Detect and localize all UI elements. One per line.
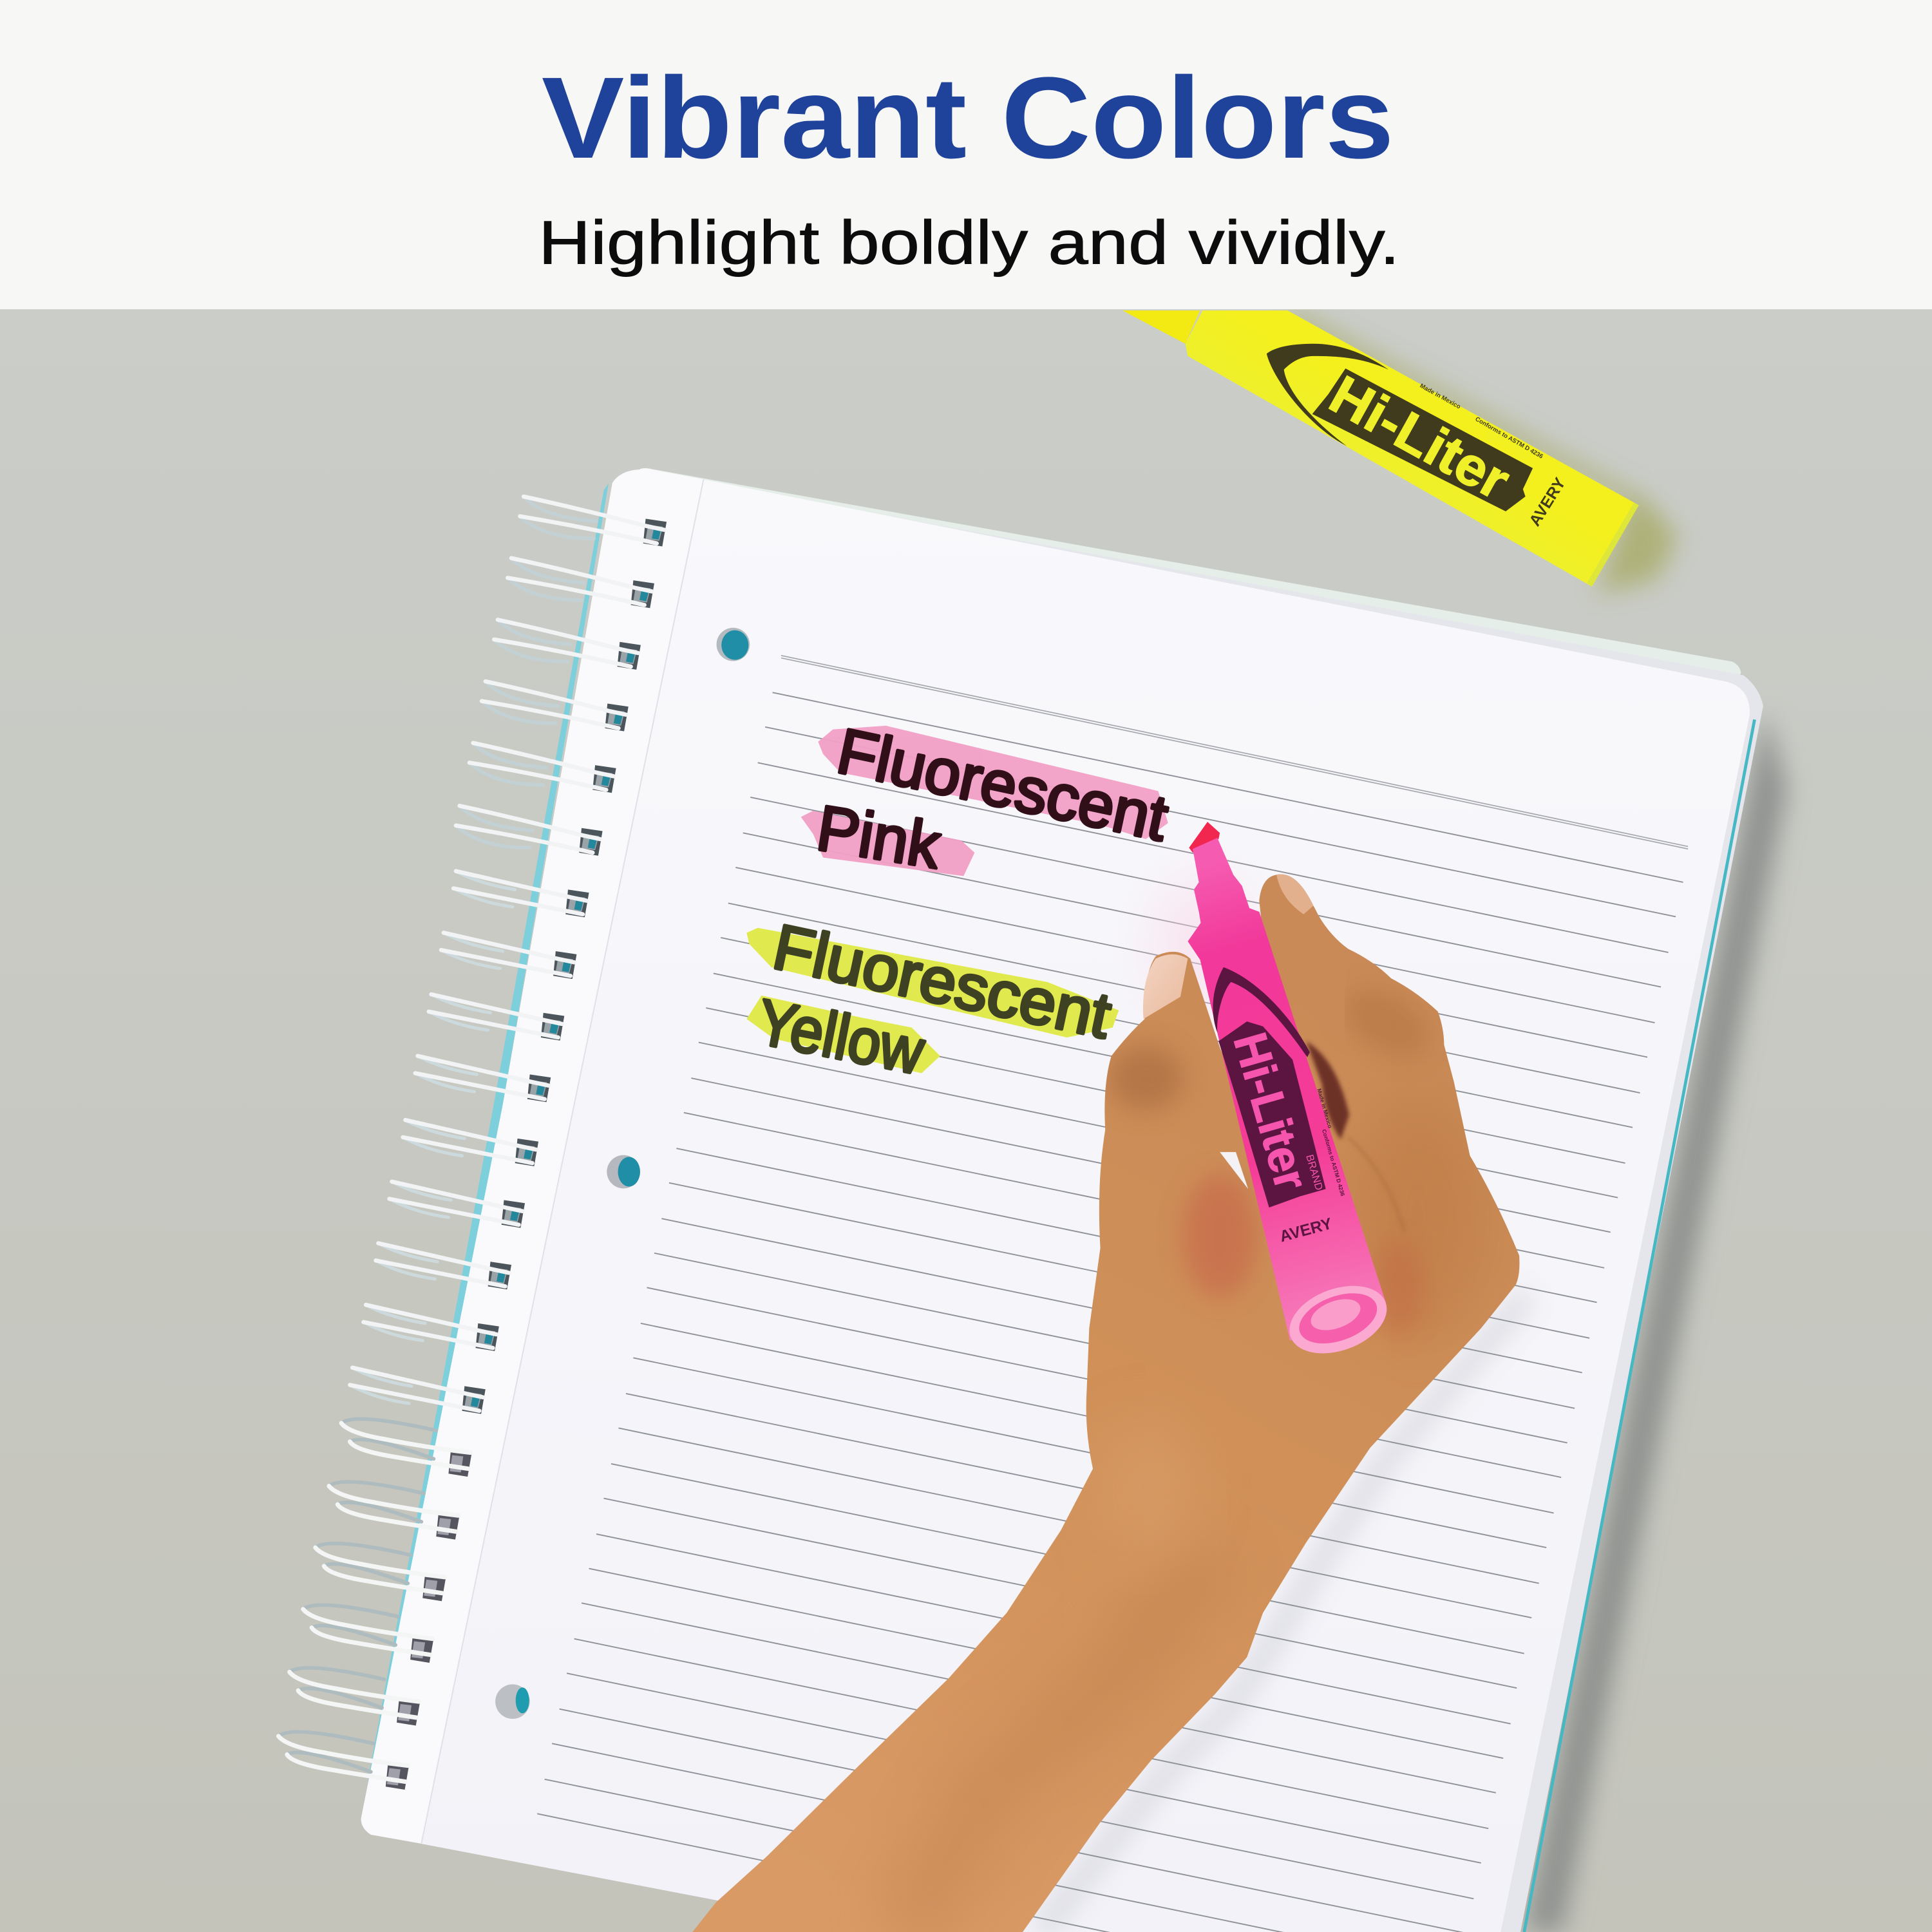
ruled lines xyxy=(537,692,1683,1932)
title: Vibrant Colors xyxy=(542,53,1394,183)
logo swoosh xyxy=(1267,344,1388,446)
dark gap behind marker xyxy=(1306,1041,1349,1140)
wrist highlight xyxy=(1135,1458,1168,1525)
index finger over marker xyxy=(1259,874,1348,1045)
thumb nail xyxy=(1143,954,1188,1019)
barrel end cap centre xyxy=(1307,1293,1365,1336)
skin silhouette xyxy=(692,875,1519,1932)
barrel end cap inner xyxy=(1293,1283,1384,1353)
perforation line xyxy=(421,479,703,1843)
pink glow on paper xyxy=(1152,875,1251,1023)
handwritten: Fluorescent Yellow: Yellow xyxy=(752,986,930,1088)
arm shadow on paper xyxy=(1041,1294,1528,1932)
notebook shadow xyxy=(1526,715,1786,1932)
hand gap showing paper xyxy=(1220,1152,1248,1189)
brand small word: BRAND xyxy=(1303,1153,1325,1191)
handwritten: Fluorescent Pink: Pink xyxy=(812,792,945,882)
page stack xyxy=(639,469,1763,1932)
avery logo: AVERY xyxy=(1526,475,1569,529)
brand name: Hi-Liter xyxy=(1320,364,1520,511)
barrel small print xyxy=(1316,1088,1346,1197)
avery logo: AVERY xyxy=(1278,1215,1334,1245)
notebook xyxy=(278,468,1786,1932)
knuckle shading xyxy=(1109,1046,1183,1110)
teal cover right edge xyxy=(1524,719,1754,1932)
barrel xyxy=(1188,838,1386,1341)
knuckle ridge xyxy=(1350,994,1425,1052)
pink highlighter xyxy=(1188,822,1396,1366)
punch hole top xyxy=(717,628,750,661)
back cover top band xyxy=(647,468,1741,692)
binding strip xyxy=(361,469,703,1843)
page sheet xyxy=(361,468,1750,1932)
barrel small print xyxy=(1419,383,1544,460)
red glow by marker base xyxy=(1374,1238,1423,1337)
forearm dark band xyxy=(914,1718,1079,1908)
palm shadow xyxy=(1367,1122,1490,1318)
punch hole middle xyxy=(607,1155,640,1188)
chisel tip xyxy=(1189,822,1220,853)
yellow marker shadow xyxy=(1282,310,1678,594)
hand and forearm xyxy=(692,875,1519,1932)
double header rule xyxy=(781,656,1688,849)
header band xyxy=(0,0,1932,309)
finger nail xyxy=(1276,874,1314,914)
subtitle: Highlight boldly and vividly. xyxy=(538,208,1399,277)
red glow beside marker xyxy=(1183,1174,1257,1298)
teal cover left edge xyxy=(366,483,609,1797)
marker tip section xyxy=(1122,310,1200,344)
barrel small print: Conforms to ASTM D 4236 xyxy=(1321,1128,1346,1197)
punch hole bottom xyxy=(495,1684,530,1719)
logo swoosh xyxy=(1213,967,1310,1057)
brand small word: BRAND xyxy=(1484,427,1533,463)
brand name: Hi-Liter xyxy=(1224,1027,1318,1195)
pink highlight swipes xyxy=(801,726,1168,876)
spiral binding xyxy=(278,497,667,1790)
yellow highlight swipes xyxy=(746,928,1119,1073)
barrel small print: Made in Mexico xyxy=(1419,383,1462,411)
skin shading xyxy=(905,976,1484,1932)
palm crease xyxy=(1348,1137,1405,1232)
handwritten: Fluorescent Yellow: Fluorescent xyxy=(767,911,1117,1052)
brand label block xyxy=(1312,368,1533,511)
barrel small print: Conforms to ASTM D 4236 xyxy=(1474,415,1544,460)
brand label block xyxy=(1218,1021,1326,1208)
barrel end cap xyxy=(1587,503,1639,587)
barrel small print: Made in Mexico xyxy=(1316,1088,1333,1129)
barrel end cap rim xyxy=(1280,1273,1396,1366)
handwritten: Fluorescent Pink: Fluorescent xyxy=(831,715,1174,855)
yellow highlighter xyxy=(1122,310,1639,587)
marker barrel xyxy=(1186,310,1639,587)
